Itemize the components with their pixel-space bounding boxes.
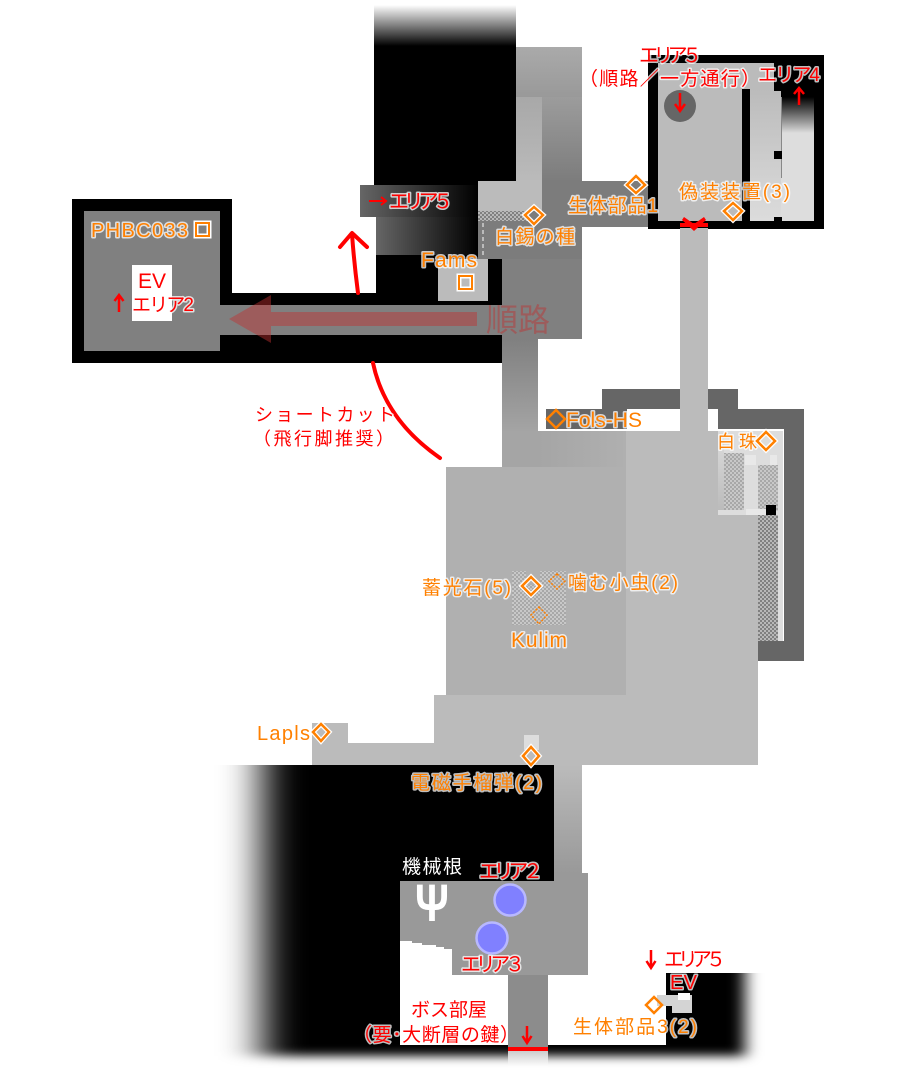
label: Kulim: Kulim	[511, 629, 567, 652]
label: camouflage device: 偽装装置(3)	[679, 181, 790, 203]
panel: main hall	[312, 431, 758, 765]
dark side room towards area 5	[360, 185, 478, 255]
label: white pearl: 白珠	[717, 432, 757, 452]
label: grenade: 電磁手榴弾(2)	[411, 772, 542, 794]
upper black void with fade	[374, 5, 516, 305]
arrow: down to area 5	[646, 950, 656, 968]
label: Fols-HS: Fols-HS	[566, 409, 642, 432]
route label: 順路	[486, 302, 550, 338]
panel: north-east rooms	[648, 55, 824, 229]
upper central shafts	[478, 47, 648, 339]
shortcut arrow	[340, 233, 440, 458]
label: boss room	[353, 999, 519, 1046]
label: area 2: エリア２	[479, 861, 543, 883]
label: Lapls: Lapls	[257, 723, 310, 745]
shortcut label: （飛行脚推奨）	[253, 429, 394, 449]
label: area 5 route: （順路／一方通行）	[579, 68, 760, 90]
arrow: to boss room	[522, 1026, 532, 1043]
label: area 4: エリア4	[758, 65, 820, 86]
label: area 5 route: エリア５	[639, 45, 702, 67]
white nook	[678, 993, 690, 1000]
area 5 down arrow	[675, 93, 685, 111]
connecting shaft to main hall	[502, 339, 538, 467]
panel: eastern wing outer wall	[538, 389, 804, 661]
label: Fams: Fams	[421, 249, 477, 272]
area 4 up arrow	[794, 88, 804, 105]
corridor south from north-east room	[680, 228, 708, 518]
panel: white pearl chamber	[718, 431, 783, 641]
label: boss room: （要･大断層の鍵）	[353, 1024, 519, 1046]
label: EV: EV	[670, 972, 698, 994]
label: EV area 2: EV	[138, 270, 166, 293]
arrow: to area 5	[369, 197, 386, 205]
panel: checkered item area	[512, 571, 566, 625]
route arrow	[229, 295, 477, 343]
area 2 portal	[494, 884, 526, 916]
label: tin seed: 白錫の種	[495, 226, 575, 248]
label: to area 5: エリア５	[389, 191, 453, 213]
area 5 teleport circle	[664, 90, 696, 122]
boss door	[508, 1047, 548, 1051]
label: chewing bug: 噛む小虫(2)	[568, 572, 678, 594]
shortcut label: ショートカット	[255, 405, 395, 425]
icon: Fams square	[459, 276, 472, 289]
label: machine root: 機械根	[402, 856, 462, 878]
panel: southern black void	[228, 765, 759, 1064]
panel: boss antechamber	[400, 765, 666, 1067]
label: EV area 2	[114, 270, 194, 316]
label: boss room: ボス部屋	[411, 999, 487, 1021]
item diamonds	[313, 176, 775, 1013]
label: area 3: エリア３	[461, 954, 525, 976]
shortcut label	[253, 405, 395, 449]
icon: PHBC033 square	[196, 223, 209, 236]
label: bio part 3: 生体部品3(2)	[573, 1016, 697, 1038]
label: bio part 1: 生体部品1	[568, 195, 658, 217]
panel: west room and corridor	[72, 199, 502, 363]
label: down to area 5: エリア５	[664, 949, 726, 971]
elevator nook	[657, 995, 692, 1013]
machine root icon: Ψ	[415, 875, 449, 933]
label: stored-light stone: 蓄光石(5)	[422, 577, 511, 599]
label: PHBC033: PHBC033	[91, 220, 188, 242]
label: area 5 route	[579, 45, 760, 90]
area 3 portal	[476, 922, 508, 954]
label: EV area 2: エリア2	[132, 295, 194, 316]
red door	[680, 217, 708, 231]
